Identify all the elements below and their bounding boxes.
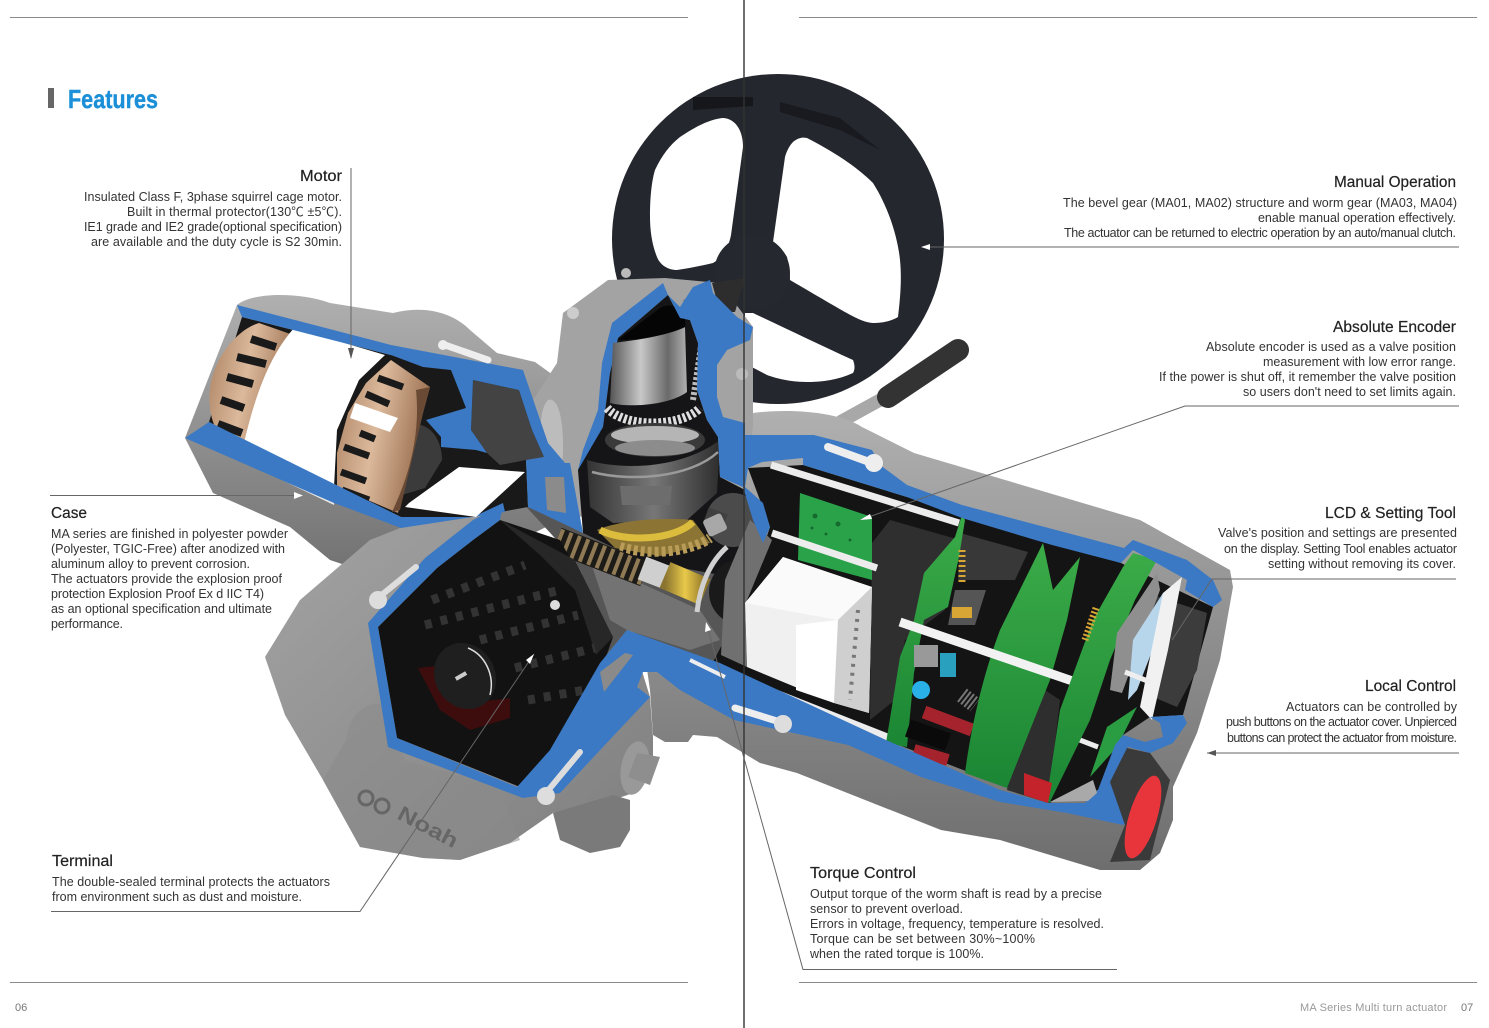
output shaft [610, 327, 687, 405]
text: Absolute Encoder: If the power is shut off, it remember the valve position [1159, 370, 1456, 384]
bolts [369, 268, 883, 805]
text: Absolute Encoder: Absolute Encoder [1333, 319, 1456, 336]
text: Local Control [1226, 678, 1458, 745]
encoder PCB [798, 493, 872, 580]
text: Case: (Polyester, TGIC-Free) after anodized with [51, 542, 285, 556]
grey slot in blue wall [545, 477, 566, 513]
terminal interior [378, 520, 613, 787]
leader: Manual Operation [921, 244, 1459, 250]
leader: LCD & Setting Tool [1172, 579, 1456, 640]
leader: Absolute Encoder [860, 406, 1459, 520]
footer: right page caption: MA Series Multi turn actuator [1300, 1002, 1447, 1014]
text: Local Control: push buttons on the actuator cover. Unpierced [1226, 715, 1457, 729]
grey slot in blue arm [600, 653, 633, 692]
text: Local Control: buttons can protect the actuator from moisture. [1227, 731, 1457, 745]
chamber left blue wall [578, 283, 668, 470]
copper end ring left [209, 323, 296, 456]
text: Terminal [52, 853, 330, 904]
motor housing and left chamber: blue wall [237, 305, 583, 533]
text: Torque Control: Torque can be set between 30%~100% [810, 932, 1035, 946]
PCB disc 3 [1047, 553, 1157, 803]
text: Terminal: Terminal [52, 853, 113, 870]
footer: right page caption: 07 [1461, 1002, 1473, 1014]
text: Manual Operation [1063, 174, 1457, 240]
text: LCD & Setting Tool: on the display. Setting Tool enables actuator [1224, 542, 1457, 556]
text: Motor: IE1 grade and IE2 grade(optional specification) [84, 220, 342, 234]
connector and components [908, 550, 986, 760]
leader: Terminal [51, 654, 534, 912]
flange [709, 559, 775, 625]
bearings [605, 423, 705, 457]
text: Motor: Built in thermal protector(130℃ ±5℃). [127, 205, 342, 219]
copper end ring right [337, 360, 430, 513]
terminal round cap [422, 632, 508, 720]
terminal red connector [418, 665, 510, 730]
text: LCD & Setting Tool [1218, 505, 1457, 571]
control knob [1110, 748, 1170, 862]
text: Local Control: Local Control [1365, 678, 1456, 695]
PCB disc 1 [886, 515, 965, 747]
text: Torque Control: Torque Control [810, 865, 916, 882]
text: LCD & Setting Tool: setting without removing its cover. [1268, 557, 1456, 571]
leader: Case [50, 492, 303, 499]
text: Motor: Motor [300, 168, 342, 185]
text: LCD & Setting Tool: Valve's position and settings are presented [1218, 526, 1457, 540]
lifting eyebolt [541, 400, 563, 465]
bevel pinion [683, 292, 727, 343]
text: Absolute Encoder: so users don't need to set limits again. [1243, 385, 1456, 399]
footer: left page number: 06 [15, 1002, 27, 1014]
handwheel [612, 74, 958, 422]
PCB disc 2 [965, 543, 1080, 788]
leader: Motor [348, 168, 354, 359]
text: Case: MA series are finished in polyester powder [51, 527, 288, 541]
centre gearbox housing [533, 278, 753, 520]
text: Case: protection Explosion Proof Ex d IIC T4) [51, 587, 264, 601]
text: Manual Operation: The actuator can be returned to electric operation by an auto/manual clutch. [1064, 226, 1456, 240]
leader: Local Control [1207, 750, 1459, 756]
text: LCD & Setting Tool: LCD & Setting Tool [1325, 505, 1456, 522]
worm shaft [557, 540, 645, 574]
text: Torque Control: when the rated torque is 100%. [809, 947, 984, 961]
text: Manual Operation: The bevel gear (MA01, MA02) structure and worm gear (MA03, MA04) [1063, 196, 1457, 210]
text: Case: aluminum alloy to prevent corrosion. [51, 557, 250, 571]
text: Motor: are available and the duty cycle is S2 30min. [91, 235, 342, 249]
bevel gear teeth [607, 408, 700, 423]
text: Local Control: Actuators can be controlled by [1286, 700, 1458, 714]
LCD display [1110, 573, 1207, 720]
text: Absolute Encoder: Absolute encoder is used as a valve position [1206, 340, 1456, 354]
gear cover and bolt [706, 493, 760, 547]
valve stem [553, 739, 660, 853]
text: Absolute Encoder [1159, 319, 1456, 399]
red connector [1024, 773, 1052, 803]
text: Case: Case [51, 505, 87, 522]
rod end in blue arm [690, 660, 725, 677]
text: Torque Control [809, 865, 1104, 961]
terminal housing facet [323, 704, 520, 860]
worm gear [597, 519, 710, 556]
support rods [705, 465, 1150, 747]
right compartment interior [705, 465, 1213, 803]
motor lower blue wall [185, 422, 505, 528]
text: Case: performance. [51, 617, 123, 631]
motor housing: outer casing [185, 295, 560, 590]
text: Torque Control: sensor to prevent overload. [810, 902, 963, 916]
title: Features: Features [68, 84, 158, 114]
rotor white band [244, 328, 385, 487]
white terminal cover plate [405, 467, 525, 517]
text: Terminal: The double-sealed terminal protects the actuators [52, 875, 330, 889]
text: Absolute Encoder: measurement with low error range. [1263, 355, 1456, 369]
text: Terminal: from environment such as dust and moisture. [52, 890, 302, 904]
centre rod [900, 622, 1090, 687]
centre chamber and gears [557, 278, 775, 625]
brand mark: Noah [394, 802, 462, 853]
right housing: outer casing [640, 411, 1233, 870]
text: Case [51, 505, 288, 631]
leader: Torque Control [705, 622, 1117, 970]
transformer block [745, 557, 872, 713]
right housing and terminal: blue lower wall [368, 505, 1187, 825]
text: Case: The actuators provide the explosion proof [51, 572, 283, 586]
illustration: cutaway actuator [185, 74, 1233, 870]
text: Manual Operation: enable manual operation effectively. [1258, 211, 1456, 225]
vertical centre line [743, 0, 745, 1028]
text: Motor: Insulated Class F, 3phase squirrel cage motor. [84, 190, 342, 204]
text: Torque Control: Output torque of the worm shaft is read by a precise [810, 887, 1102, 901]
text: Torque Control: Errors in voltage, frequency, temperature is resolved. [810, 917, 1104, 931]
right housing: blue upper wall [668, 280, 1222, 607]
inner grey wedge [1050, 780, 1097, 802]
brand mark [359, 791, 462, 853]
motor interior [209, 317, 544, 517]
text: Case: as an optional specification and ultimate [51, 602, 272, 616]
header pins [1085, 608, 1096, 640]
centre mechanism filler [520, 500, 772, 665]
text: Motor [84, 168, 342, 249]
text: Manual Operation: Manual Operation [1334, 174, 1456, 191]
terminal housing: outer casing [265, 500, 653, 860]
